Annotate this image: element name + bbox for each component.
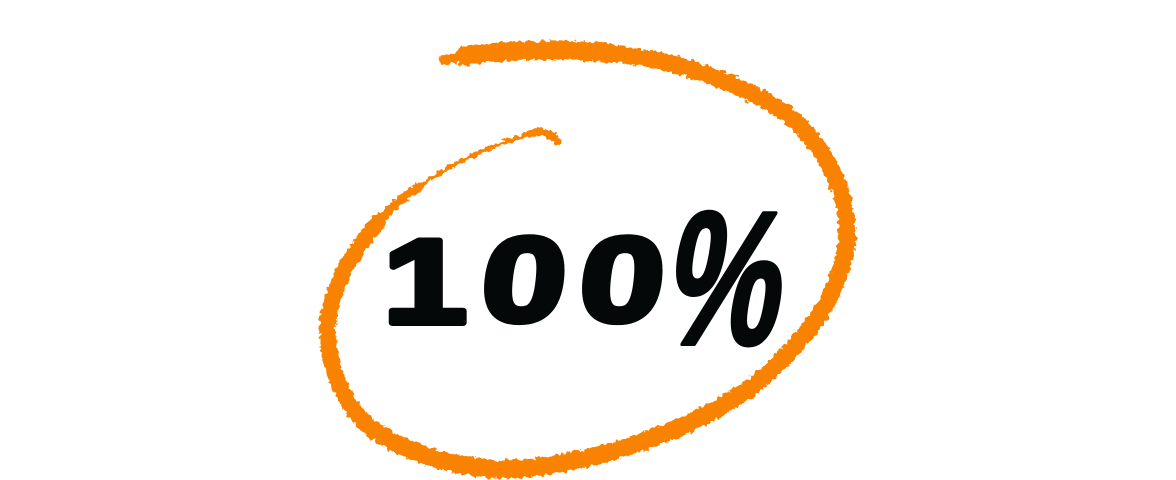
100% label: 0 [573,212,672,346]
100% label: % [653,172,805,385]
100% label: 1 [383,214,467,348]
100% label [383,172,805,385]
100% label: 0 [475,212,574,346]
hand-drawn orange circle [328,50,847,469]
